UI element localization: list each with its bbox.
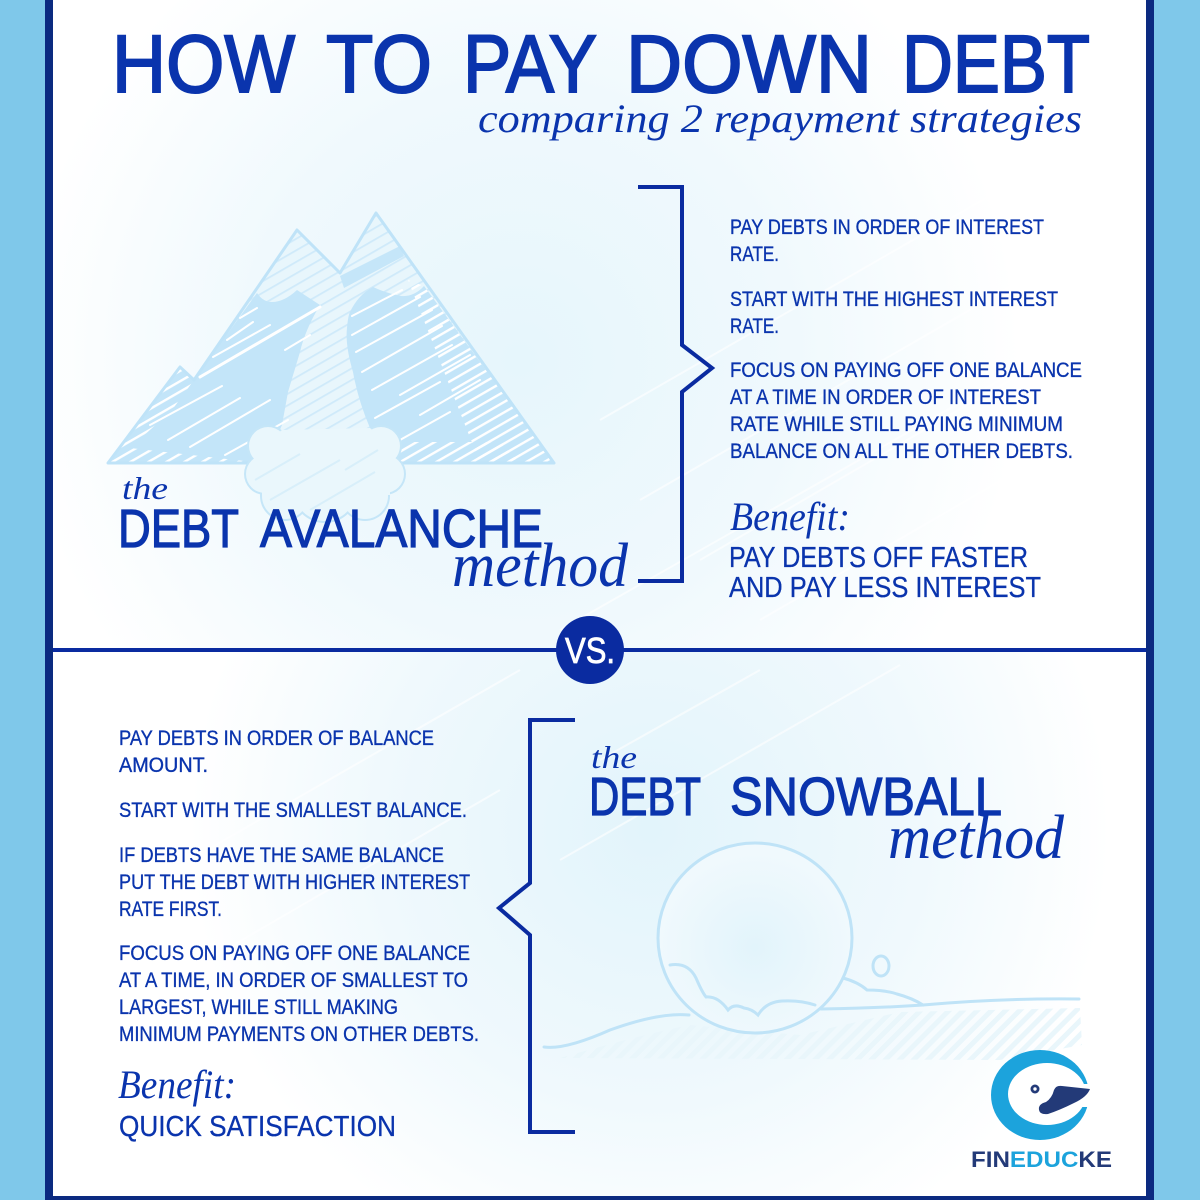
title	[112, 19, 1090, 110]
text block: avalanche steps: RATE.	[730, 315, 779, 338]
heading: the debt snowball method: SNOWBALL	[730, 767, 1002, 827]
heading: the debt snowball method: method	[888, 804, 1065, 872]
text block: snowball steps: LARGEST, WHILE STILL MAKING	[119, 996, 398, 1019]
text block: snowball steps: START WITH THE SMALLEST BALANCE.	[119, 799, 467, 822]
heading: the debt avalanche method: method	[452, 532, 629, 600]
text block: snowball benefit: QUICK SATISFACTION	[119, 1111, 396, 1143]
text block: snowball steps: RATE FIRST.	[119, 898, 222, 921]
text block: avalanche steps: PAY DEBTS IN ORDER OF INTEREST	[730, 216, 1044, 239]
heading: the debt avalanche method: DEBT	[118, 499, 239, 559]
text block: avalanche steps	[730, 216, 1082, 463]
text block: snowball steps: FOCUS ON PAYING OFF ONE BALANCE	[119, 942, 470, 965]
icon: snowball on hill	[544, 843, 1082, 1060]
text block: avalanche benefit	[729, 494, 1041, 604]
avalanche cloud	[244, 425, 406, 523]
subtitle: comparing 2 repayment strategies	[478, 96, 1082, 141]
text block: snowball steps: IF DEBTS HAVE THE SAME BALANCE	[119, 844, 444, 867]
bracket: snowball	[499, 720, 575, 1132]
text block: snowball benefit	[118, 1062, 396, 1143]
icon: mountains with avalanche	[100, 205, 560, 523]
divider with vs badge	[53, 616, 1146, 684]
divider with vs badge: VS.	[565, 630, 615, 671]
text block: avalanche steps: RATE WHILE STILL PAYING MINIMUM	[730, 413, 1063, 436]
text block: snowball steps: MINIMUM PAYMENTS ON OTHER DEBTS.	[119, 1023, 479, 1046]
text block: avalanche steps: BALANCE ON ALL THE OTHER DEBTS.	[730, 440, 1073, 463]
bracket: avalanche	[638, 187, 712, 581]
title: HOW	[112, 19, 296, 110]
logo: fineducke	[971, 1050, 1112, 1172]
text block: avalanche steps: START WITH THE HIGHEST INTEREST	[730, 288, 1058, 311]
text block: snowball steps: AT A TIME, IN ORDER OF SMALLEST TO	[119, 969, 468, 992]
text block: avalanche steps: RATE.	[730, 243, 779, 266]
panel: debt avalanche method	[100, 187, 1082, 604]
heading: the debt avalanche method: AVALANCHE	[260, 499, 543, 559]
title: DOWN	[626, 19, 872, 110]
heading: the debt snowball method	[589, 739, 1065, 872]
heading: the debt avalanche method	[118, 470, 629, 600]
text block: avalanche benefit: PAY DEBTS OFF FASTER	[729, 542, 1028, 574]
title: PAY	[463, 19, 597, 110]
title: TO	[326, 19, 432, 110]
heading: the debt snowball method: the	[591, 739, 637, 775]
heading: the debt snowball method: DEBT	[589, 767, 701, 827]
text block: snowball steps: AMOUNT.	[119, 754, 208, 777]
text block: snowball benefit: Benefit:	[118, 1062, 236, 1107]
logo wordmark: FINEDUC KE	[971, 1147, 1112, 1172]
icon: duck head	[991, 1050, 1096, 1140]
text block: avalanche benefit: AND PAY LESS INTEREST	[729, 572, 1041, 604]
text block: avalanche benefit: Benefit:	[730, 494, 850, 539]
text block: avalanche steps: AT A TIME IN ORDER OF INTEREST	[730, 386, 1041, 409]
text block: snowball steps: PAY DEBTS IN ORDER OF BALANCE	[119, 727, 434, 750]
panel: debt snowball method	[118, 720, 1112, 1172]
title: DEBT	[902, 19, 1090, 110]
text block: snowball steps: PUT THE DEBT WITH HIGHER INTEREST	[119, 871, 470, 894]
heading: the debt avalanche method: the	[122, 470, 168, 506]
text block: avalanche steps: FOCUS ON PAYING OFF ONE BALANCE	[730, 359, 1082, 382]
text block: snowball steps	[119, 727, 479, 1046]
